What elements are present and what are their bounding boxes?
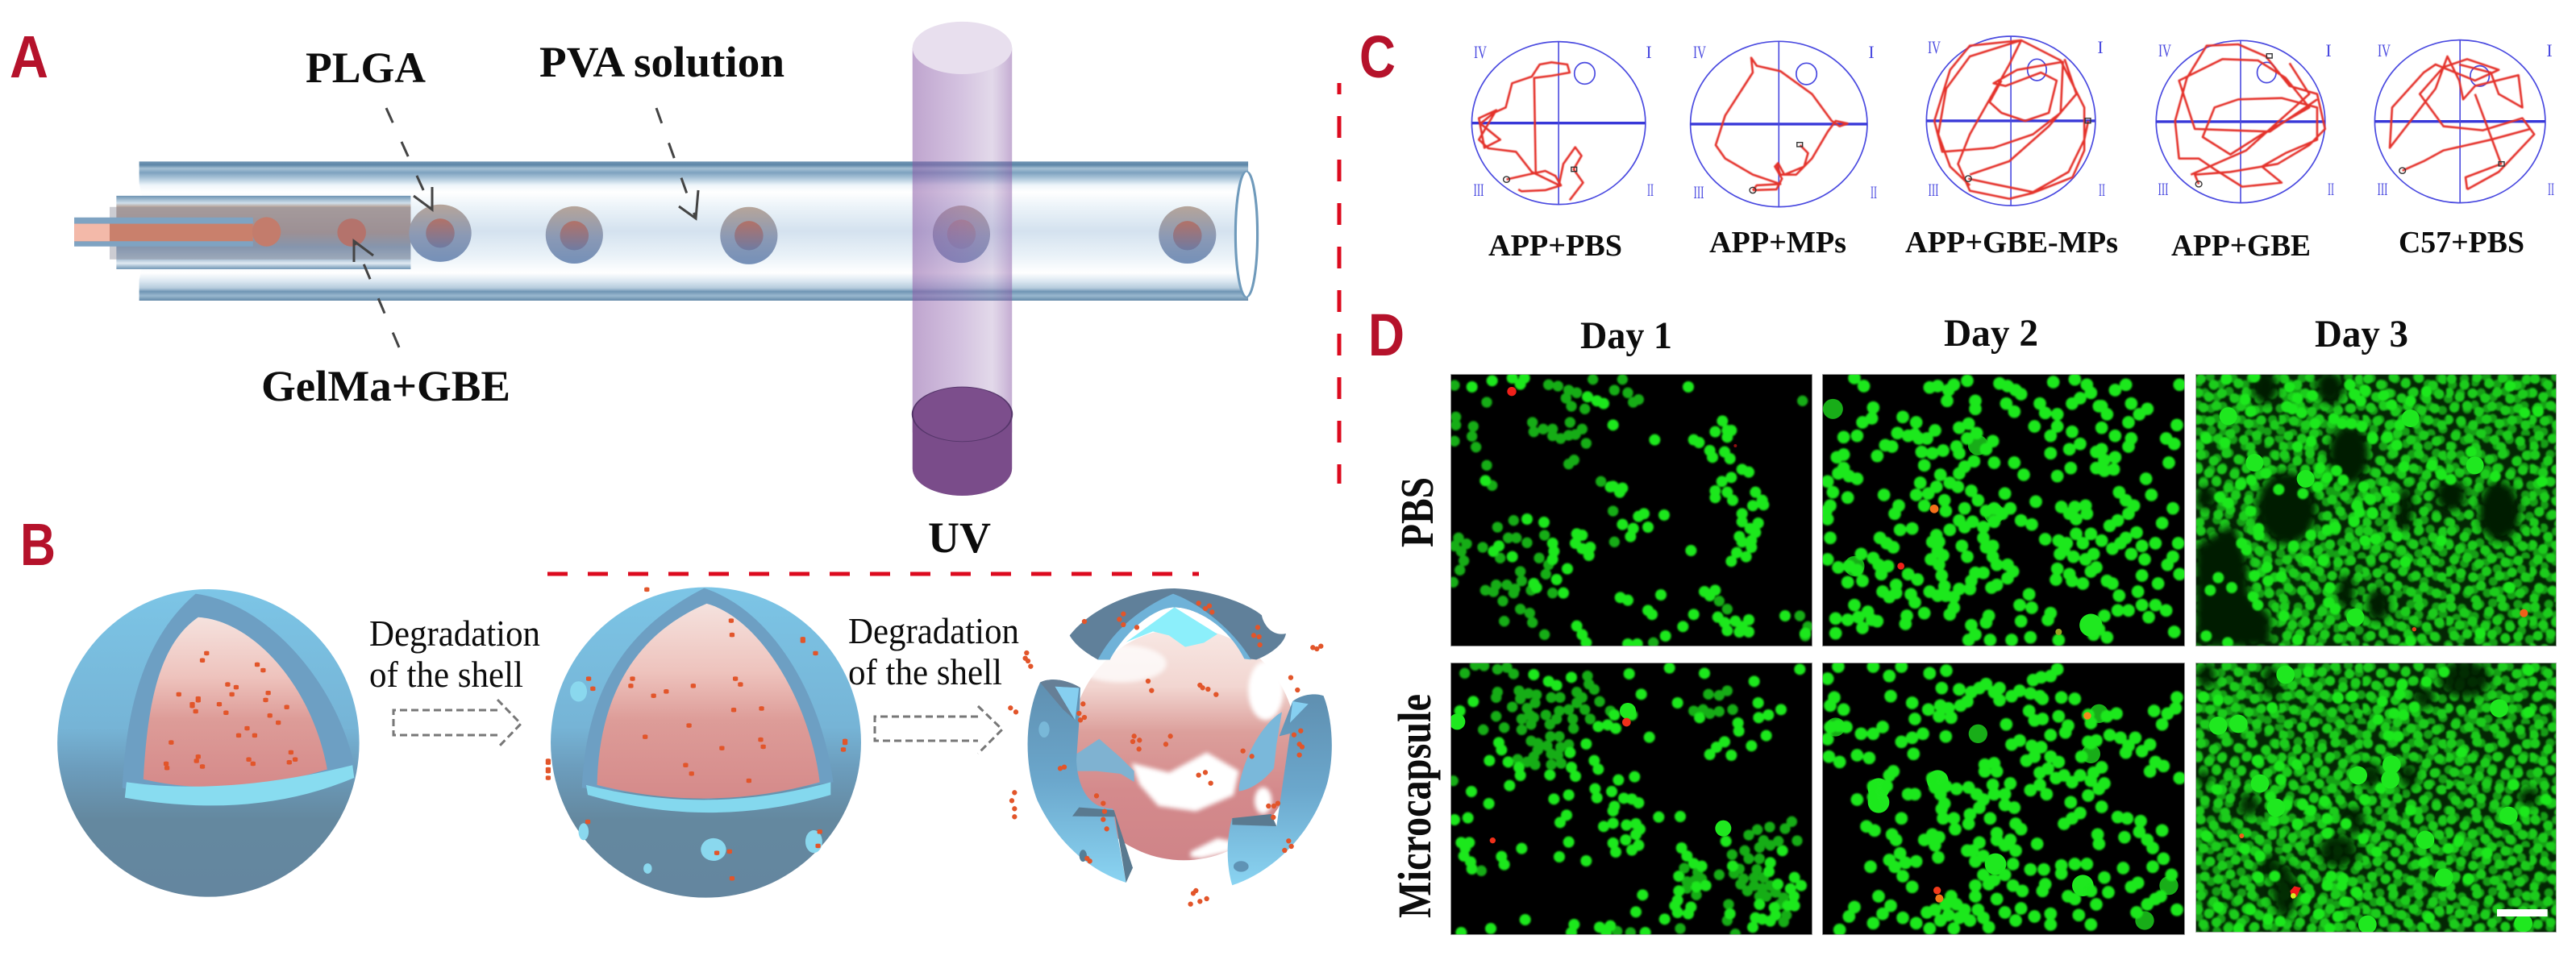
quadrant marks C2: II <box>1871 182 1877 202</box>
maze: APP+GBE-MPs <box>1926 36 2095 206</box>
quadrant marks C5: II <box>2548 179 2554 199</box>
quadrant marks C2: I <box>1868 42 1875 62</box>
quadrant marks C3: IV <box>1928 37 1941 57</box>
quadrant marks C4: II <box>2328 179 2334 199</box>
column headings: Day 1 <box>1580 314 1672 357</box>
label PLGA: PLGA <box>306 44 426 92</box>
maze group labels: APP+PBS <box>1488 229 1622 263</box>
arrow: GelMa+GBE <box>354 241 399 347</box>
maze group labels: APP+MPs <box>1709 226 1846 260</box>
quadrant marks C1: II <box>1647 180 1654 200</box>
panel letter D: D <box>1368 301 1405 368</box>
label GelMa+GBE: GelMa+GBE <box>261 362 510 410</box>
sphere 2: shell with pores <box>548 588 861 898</box>
maze group labels: APP+GBE <box>2171 229 2311 263</box>
quadrant marks C4: I <box>2325 40 2332 60</box>
text: Degradation of the shell (2) <box>848 610 1019 692</box>
row heading Microcapsule: Microcapsule <box>1388 694 1441 918</box>
panel letter A: A <box>10 23 48 90</box>
quadrant marks C1 <box>1474 42 1654 200</box>
label UV: UV <box>928 513 991 562</box>
quadrant marks C2 <box>1693 42 1877 202</box>
pores in shell <box>570 681 822 874</box>
maze group labels <box>1488 226 2524 263</box>
quadrant marks C2: IV <box>1693 42 1706 62</box>
text: Degradation of the shell (2): Degradation <box>848 610 1019 651</box>
dead cells <box>1933 712 2091 903</box>
quadrant marks C4: IV <box>2158 40 2171 60</box>
text: Degradation of the shell (1) <box>369 613 540 695</box>
droplets in the tube <box>409 205 472 262</box>
maze group labels: APP+GBE-MPs <box>1905 226 2118 260</box>
label PVA solution: PVA solution <box>539 38 784 86</box>
quadrant marks C5: III <box>2377 179 2388 199</box>
quadrant marks C5: I <box>2546 40 2553 60</box>
micrograph: microcapsule day 3 <box>2195 663 2557 933</box>
top shell fragment <box>1070 588 1286 659</box>
quadrant marks C3: II <box>2099 180 2105 200</box>
micrograph: PBS day 3 <box>2195 374 2557 646</box>
micrograph: microcapsule day 2 <box>1822 663 2185 935</box>
maze: APP+MPs <box>1691 41 1867 207</box>
dead cells <box>2239 833 2301 899</box>
quadrant marks C4: III <box>2158 179 2169 199</box>
quadrant marks C5 <box>2377 40 2554 199</box>
micrograph: PBS day 1 <box>1450 374 1812 646</box>
text: Degradation of the shell (2): of the shell <box>848 651 1002 692</box>
panel letter B: B <box>20 511 56 578</box>
right shell fragment <box>1239 712 1282 792</box>
outer glass tube <box>74 161 1258 301</box>
quadrant marks C2: III <box>1693 182 1704 202</box>
quadrant marks C5: IV <box>2378 40 2391 60</box>
text: Degradation of the shell (1): of the shell <box>369 654 523 695</box>
quadrant marks C1: IV <box>1474 42 1487 62</box>
maze: C57+PBS <box>2374 40 2545 203</box>
arrow: PVA solution <box>656 108 698 218</box>
row heading PBS: PBS <box>1391 477 1443 547</box>
vertical red dashed divider <box>1337 83 1342 484</box>
quadrant marks C1: I <box>1646 42 1652 62</box>
column headings: Day 3 <box>2315 313 2408 355</box>
panel A: microfluidic device <box>10 22 1258 562</box>
dead cells <box>1507 387 1737 447</box>
dead cells <box>2412 609 2528 631</box>
maze: APP+GBE <box>2156 40 2325 203</box>
arrow 1: degradation <box>393 700 521 748</box>
quadrant marks C4 <box>2158 40 2334 199</box>
left shell fragment <box>1028 679 1126 883</box>
UV light column <box>913 22 1012 496</box>
quadrant marks C1: III <box>1474 180 1484 200</box>
quadrant marks C3 <box>1928 37 2105 200</box>
maze group labels: C57+PBS <box>2399 226 2524 260</box>
micrograph: PBS day 2 <box>1822 374 2185 646</box>
inner needle <box>116 196 410 269</box>
panel letter C: C <box>1359 23 1396 90</box>
scale bar <box>2497 909 2548 916</box>
sphere 1: intact shell <box>57 589 360 897</box>
column headings <box>1580 312 2408 357</box>
column headings: Day 2 <box>1944 312 2038 355</box>
text: Degradation of the shell (1): Degradation <box>369 613 540 654</box>
panel B: shell degradation <box>20 511 1332 904</box>
sphere 3: broken shell <box>1010 588 1332 904</box>
arrow: PLGA <box>386 108 432 210</box>
panel C: water maze traces <box>1359 23 2554 263</box>
dead cells <box>1490 718 1631 843</box>
panel D: live/dead micrographs <box>1368 301 2558 935</box>
dead cells <box>1897 505 2062 635</box>
maze: APP+PBS <box>1471 42 1646 205</box>
arrow 2: degradation <box>875 706 1002 754</box>
quadrant marks C3: I <box>2097 37 2104 57</box>
horizontal red dashed divider <box>547 572 1199 576</box>
micrograph: microcapsule day 1 <box>1450 663 1812 935</box>
quadrant marks C3: III <box>1929 180 1938 200</box>
